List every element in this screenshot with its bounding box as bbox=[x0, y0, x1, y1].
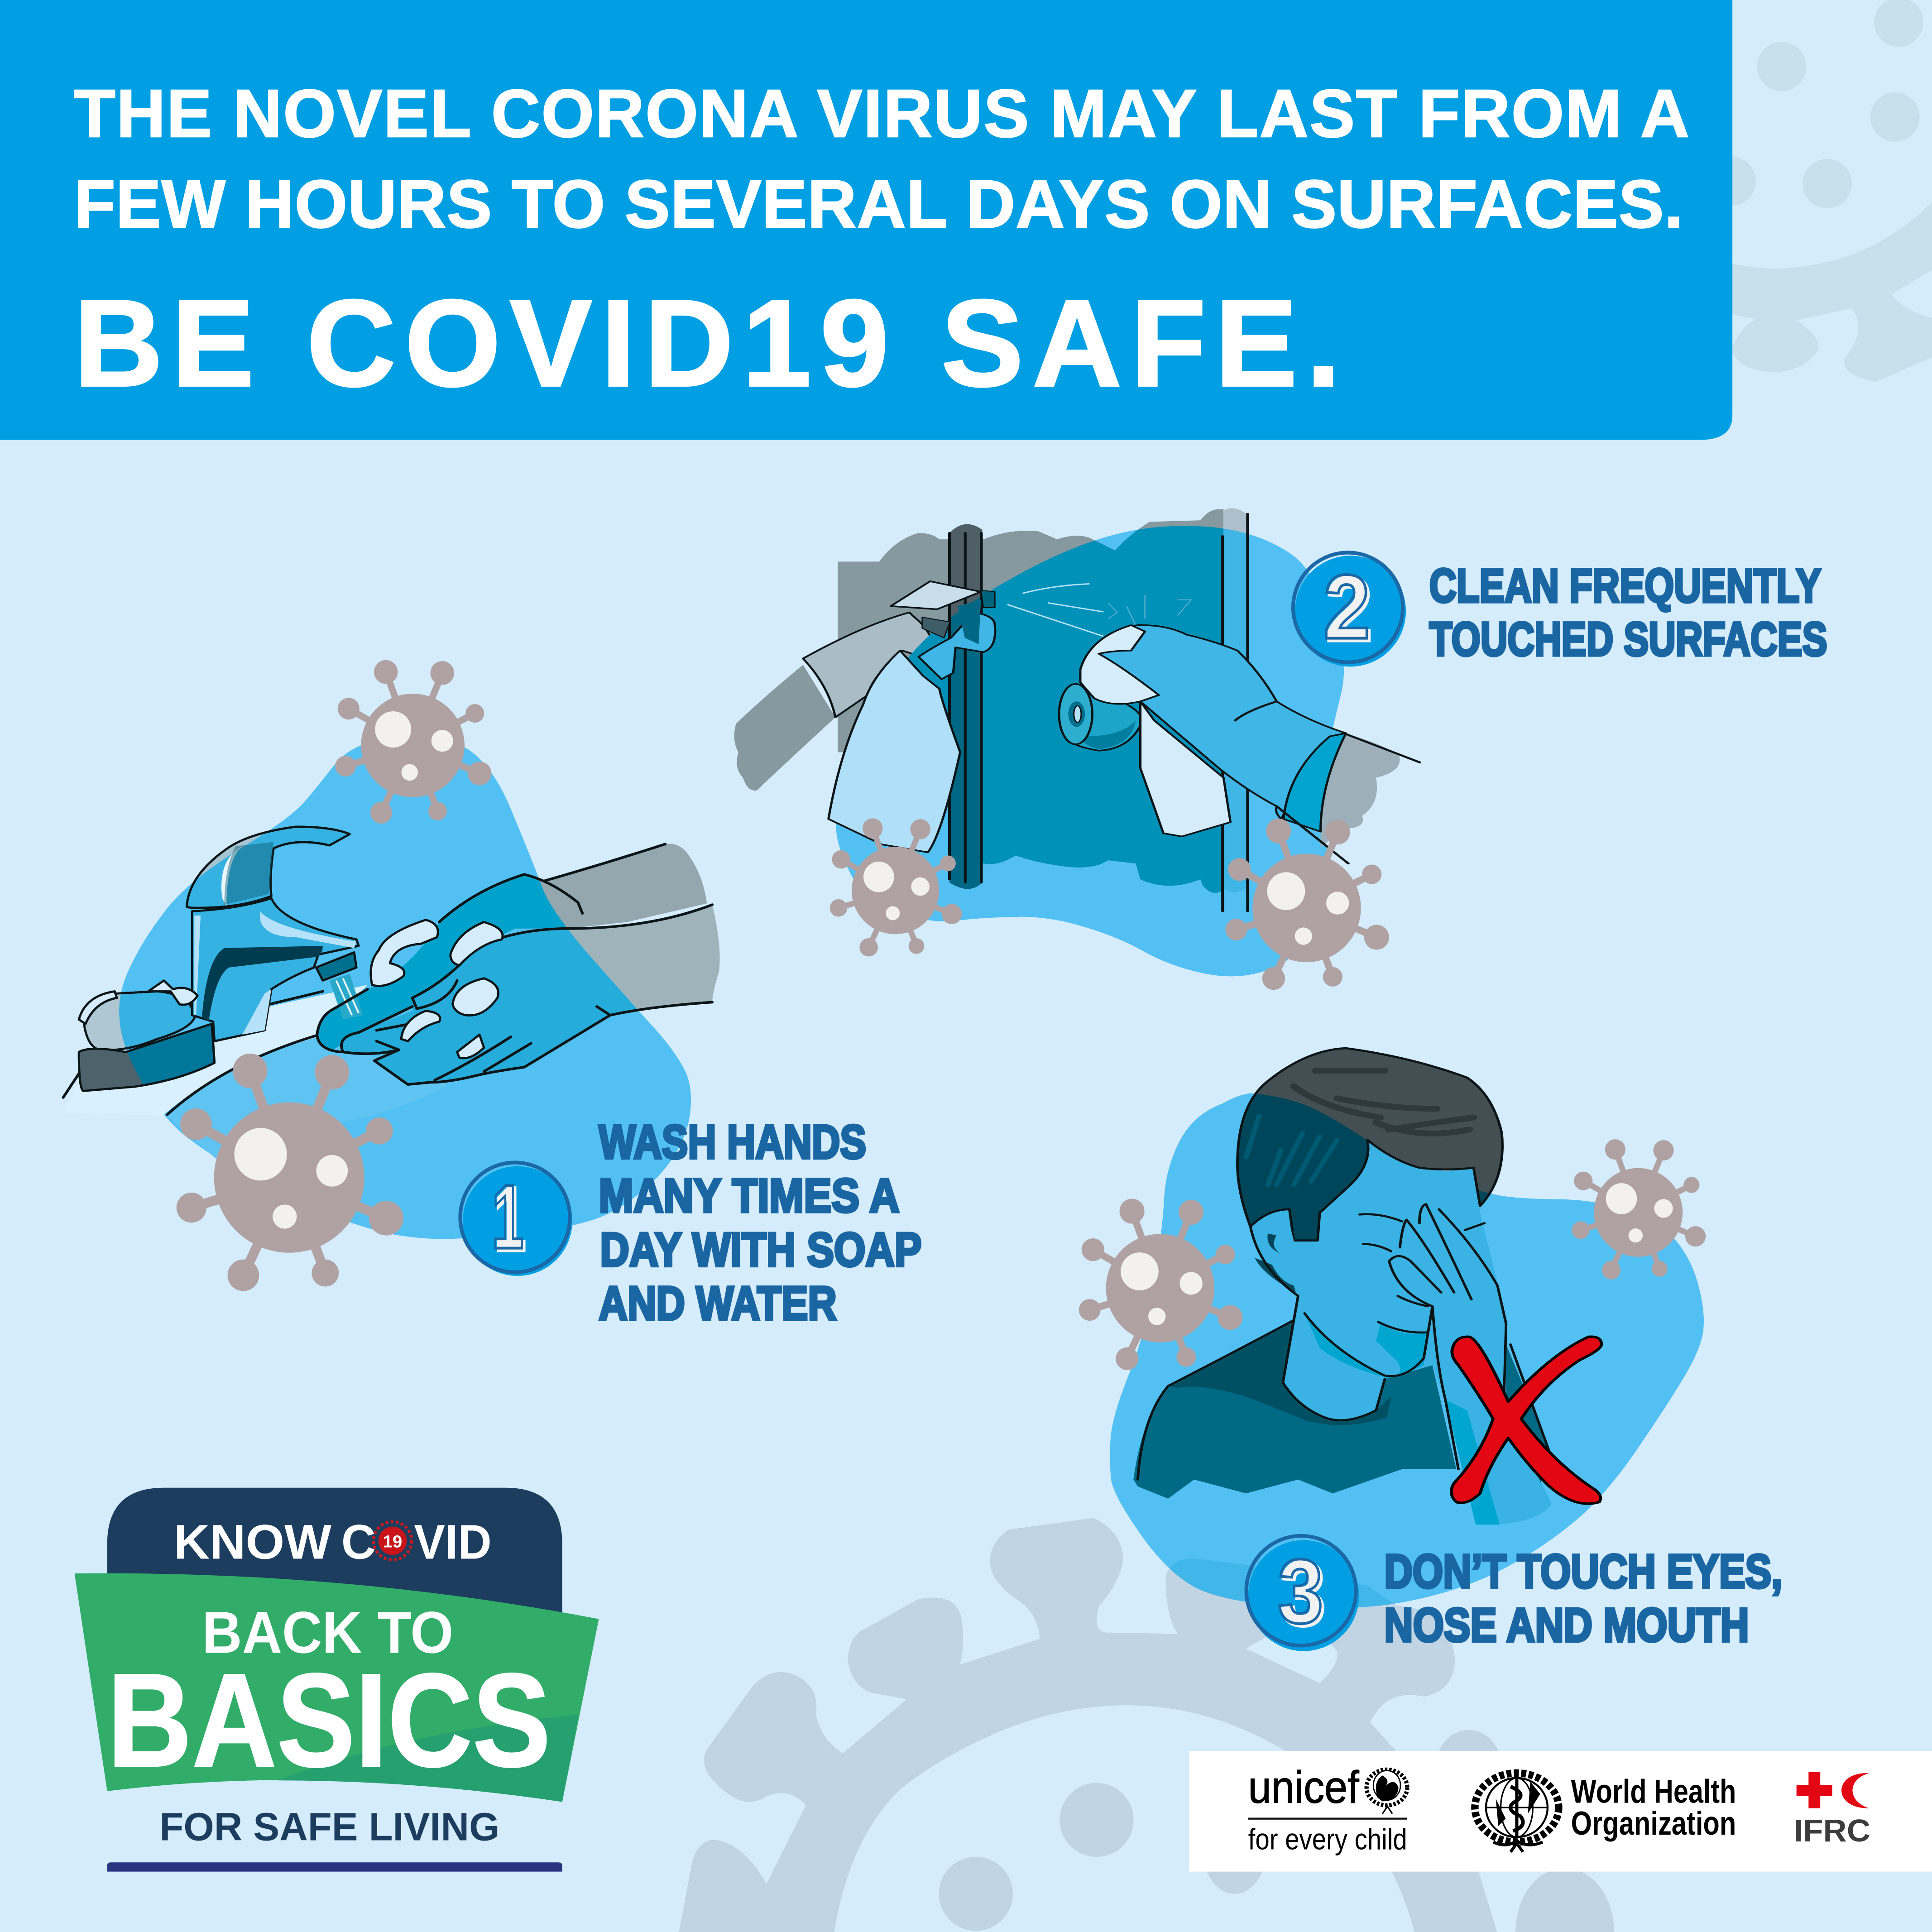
icon: red X mark bbox=[1451, 1337, 1601, 1504]
know covid text: KNOW bbox=[174, 1515, 332, 1569]
logo: unicef: unicef bbox=[1248, 1762, 1360, 1812]
body bbox=[1133, 1320, 1456, 1499]
watermark: large virus bottom bbox=[679, 1518, 1614, 1932]
logo: world health organization: Organization bbox=[1571, 1804, 1736, 1842]
know covid text: VID bbox=[414, 1515, 492, 1569]
step 2 number badge: 2 bbox=[1326, 558, 1373, 660]
illustration: door, spray and glove bbox=[734, 508, 1420, 911]
foam bbox=[79, 920, 503, 1058]
step 2 number badge: 2 bbox=[1323, 556, 1370, 658]
watermark overlap on blob bbox=[679, 1518, 1497, 1932]
logo: world health organization: World Health bbox=[1571, 1772, 1736, 1810]
back to: BACK TO bbox=[202, 1599, 453, 1665]
know covid text: C bbox=[341, 1515, 376, 1569]
emblem: WHO bbox=[1475, 1769, 1558, 1852]
step 3 text: NOSE AND MOUTH bbox=[1384, 1599, 1749, 1652]
logo: world health organization bbox=[1475, 1769, 1736, 1852]
green banner bbox=[75, 1573, 599, 1802]
step 3 text: DON’T TOUCH EYES, bbox=[1384, 1545, 1782, 1598]
panel: step 3 do not touch face bbox=[679, 1048, 1706, 1932]
headline line 2: FEW HOURS TO SEVERAL DAYS ON SURFACES. bbox=[74, 166, 1683, 242]
icon: virus right bbox=[1225, 819, 1389, 990]
step 3 number badge: 3 bbox=[1278, 1540, 1323, 1642]
dark panel bbox=[107, 1488, 562, 1626]
know covid text bbox=[174, 1515, 492, 1569]
logo: unicef: for every child bbox=[1248, 1823, 1407, 1856]
icon: virus left bbox=[830, 818, 962, 957]
step 2 text: CLEAN FREQUENTLY bbox=[1429, 559, 1821, 612]
soap grey bbox=[83, 991, 195, 1050]
icon: virus left bbox=[1079, 1199, 1242, 1370]
blob 3 bbox=[1110, 1093, 1704, 1608]
step 2 number badge bbox=[1293, 553, 1406, 666]
logo strip bbox=[1189, 1751, 1932, 1872]
title bbox=[74, 76, 1689, 412]
step 2 text: TOUCHED SURFACES bbox=[1429, 613, 1827, 666]
spray bbox=[1007, 584, 1103, 636]
icon: red 19 virus bbox=[374, 1522, 412, 1560]
step 1 text: AND WATER bbox=[599, 1277, 837, 1330]
blob 1 bbox=[119, 736, 691, 1239]
hand outlines bbox=[317, 844, 712, 1084]
icon: virus right bbox=[1572, 1139, 1706, 1280]
knob bbox=[1071, 686, 1143, 751]
panel: step 2 clean surfaces bbox=[734, 508, 1420, 990]
step 1 text: MANY TIMES A bbox=[599, 1169, 900, 1222]
step 1 number badge: 1 bbox=[494, 1168, 526, 1270]
ear bbox=[1257, 1222, 1294, 1255]
basics: BASICS bbox=[107, 1646, 551, 1795]
step 3 text bbox=[1384, 1545, 1782, 1652]
cleaning hand bbox=[1099, 625, 1346, 819]
trigger head bbox=[891, 581, 981, 609]
arms grey bbox=[317, 844, 707, 1051]
step 3 number badge: 3 bbox=[1280, 1543, 1326, 1644]
headline line 3: BE COVID19 SAFE. bbox=[74, 274, 1341, 412]
hand bbox=[1389, 1204, 1506, 1410]
hair grey bbox=[1237, 1048, 1502, 1241]
step 1 text: WASH HANDS bbox=[599, 1116, 866, 1169]
icon: virus large bbox=[177, 1054, 403, 1291]
faucet body bbox=[192, 898, 359, 1041]
illustration: man touching face bbox=[1133, 1048, 1552, 1525]
icon: red crescent bbox=[1841, 1773, 1869, 1808]
cloth bbox=[1141, 701, 1231, 836]
bottle bbox=[829, 651, 960, 852]
blob 2 bbox=[836, 526, 1344, 976]
panel: step 1 wash hands bbox=[63, 660, 720, 1291]
step 1 text bbox=[599, 1116, 922, 1330]
headline line 1: THE NOVEL CORONA VIRUS MAY LAST FROM A bbox=[74, 76, 1689, 151]
emblem: unicef bbox=[1366, 1769, 1407, 1814]
icon: virus small top bbox=[335, 660, 491, 824]
holding hand bbox=[919, 613, 995, 679]
logo: IFRC: IFRC bbox=[1794, 1813, 1870, 1848]
icon: red 19 virus: 19 bbox=[383, 1532, 402, 1551]
logo: IFRC bbox=[1794, 1772, 1870, 1848]
handle grey bbox=[187, 827, 350, 908]
header banner bbox=[0, 0, 1732, 440]
arm/face bbox=[1251, 1140, 1552, 1525]
watermark: virus top right bbox=[1707, 0, 1932, 382]
icon: red cross bbox=[1797, 1772, 1832, 1808]
logo: unicef bbox=[1248, 1762, 1407, 1856]
step 1 number badge bbox=[460, 1163, 572, 1276]
illustration: faucet, soap and hands bbox=[63, 827, 720, 1158]
step 3 number badge bbox=[1246, 1536, 1359, 1651]
blue bar bbox=[107, 1862, 562, 1872]
for safe living: FOR SAFE LIVING bbox=[159, 1805, 499, 1849]
badge: know covid back to basics bbox=[75, 1488, 599, 1872]
step 1 number badge: 1 bbox=[492, 1166, 524, 1268]
step 1 text: DAY WITH SOAP bbox=[600, 1223, 922, 1276]
step 2 text bbox=[1429, 559, 1827, 666]
